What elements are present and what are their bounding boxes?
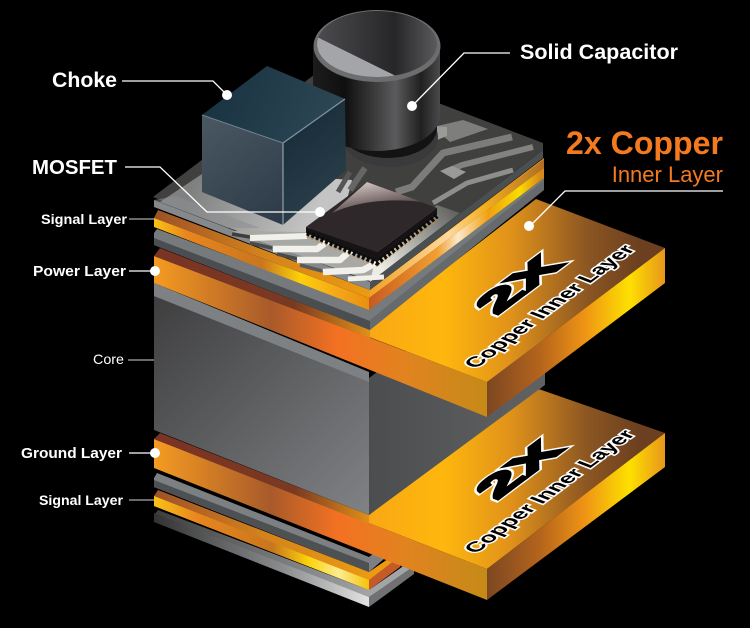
upper thin copper layer [154,158,544,310]
heading: 2x Copper Inner Layer [524,125,723,231]
front right board area [370,205,460,282]
label: Signal Layer bottom: Signal Layer [39,492,124,508]
label: Power Layer: Power Layer [33,264,126,280]
translucent front band [154,196,260,228]
top board with traces [153,62,543,290]
label: Core: Core [93,351,124,367]
upper copper plate [154,199,665,417]
label: Solid Capacitor [407,41,678,111]
label: Choke: Choke [52,69,117,92]
label: Signal Layer top: Signal Layer [41,211,128,227]
icon: solid capacitor [313,10,440,158]
label: MOSFET [32,157,325,217]
bottom signal layers [154,473,414,607]
core [154,250,545,515]
upper plate text: 2x Copper Inner Layer: 2X [465,252,573,318]
label: Ground Layer [21,446,160,462]
light board surface [160,170,377,281]
lower plate text: 2x Copper Inner Layer: 2X [465,437,573,503]
icon: MOSFET chip [306,182,437,265]
grey signal substrate [154,178,544,330]
circuit traces front [232,234,384,279]
heading: 2x Copper Inner Layer: Inner Layer [612,162,723,187]
layered PCB stack [153,62,665,607]
label: Core [93,351,154,367]
label: MOSFET: MOSFET [32,157,117,179]
lower copper plate [154,386,665,600]
label: Choke [52,69,232,100]
upper plate text: 2x Copper Inner Layer: Copper Inner Layer [459,243,641,371]
lower plate text: 2x Copper Inner Layer: Copper Inner Layer [459,428,641,556]
upper plate text: 2x Copper Inner Layer: 2X [465,252,573,318]
icon: choke cube [202,66,346,225]
trace zone [232,231,377,281]
label: Power Layer [33,264,160,280]
circuit traces back [338,120,533,203]
lower plate text: 2x Copper Inner Layer: 2X [465,437,573,503]
label: Ground Layer: Ground Layer [21,446,122,462]
label: Solid Capacitor: Solid Capacitor [520,41,678,64]
heading: 2x Copper Inner Layer: 2x Copper [566,125,723,161]
